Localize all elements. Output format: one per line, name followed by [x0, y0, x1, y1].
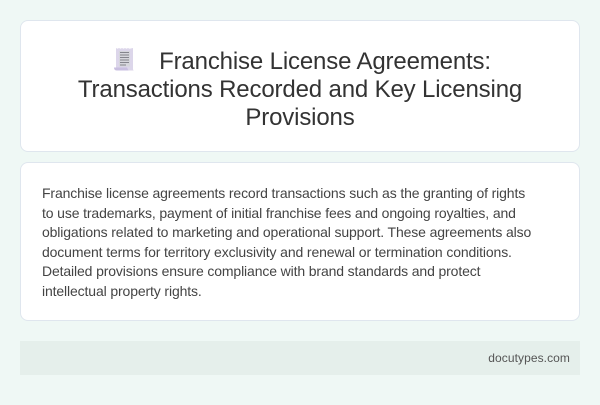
footer bar [20, 341, 580, 375]
heading: Transactions Recorded and Key Licensing [78, 76, 522, 103]
footer text: docutypes.com [488, 351, 570, 365]
text block: description: to use trademarks, payment of initial franchise fees and ongoing royalties, and [42, 205, 516, 221]
icon: document scroll [114, 48, 134, 70]
text block: description: document terms for territory exclusivity and renewal or termination conditions. [42, 244, 512, 260]
heading: Provisions [245, 104, 355, 131]
text block: description [42, 185, 531, 299]
panel: description card [20, 162, 580, 321]
text block: description: Detailed provisions ensure compliance with brand standards and protect [42, 263, 480, 279]
text block: description: intellectual property rights. [42, 283, 202, 299]
text block: description: obligations related to marketing and operational support. These agreements also [42, 224, 531, 240]
panel: title card [20, 20, 580, 152]
heading: Franchise License Agreements: [159, 48, 491, 75]
text block: description: Franchise license agreements record transactions such as the granting of rights [42, 185, 525, 201]
heading [78, 48, 522, 131]
